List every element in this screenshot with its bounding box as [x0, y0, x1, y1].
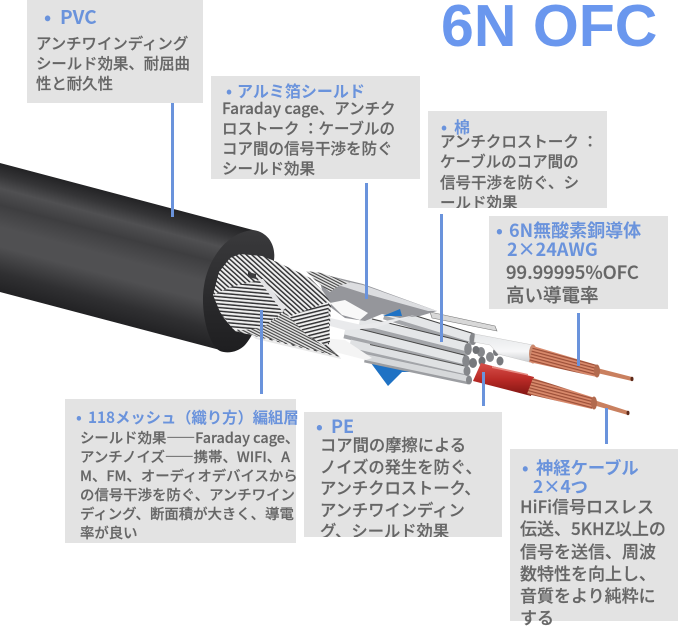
red insulated wire	[473, 363, 534, 396]
text: braid description: M、FM、オーディオデバイスから	[80, 465, 298, 486]
panel: 118 mesh braid: •	[76, 406, 82, 428]
text: braid description: ディング、断面積が大きく、導電	[80, 503, 294, 524]
text: PVC description	[36, 32, 190, 94]
text: PVC description: 性と耐久性	[36, 72, 113, 94]
back white wire sliver	[430, 312, 497, 331]
text: nerve cable description: HiFi信号ロスレス	[520, 493, 654, 518]
leader line: braid	[260, 310, 263, 394]
heading: braid: 118メッシュ（織り方）編組層	[88, 406, 299, 428]
text: nerve cable description: 伝送、5KHZ以上の	[520, 515, 666, 540]
copper conductor lower	[527, 378, 595, 409]
leader line: cotton	[440, 214, 443, 342]
text: cotton description: アンチクロストーク ：	[440, 130, 598, 152]
leader line: foil	[365, 183, 368, 299]
text: conductor description: 高い導電率	[506, 282, 599, 308]
text: conductor description: 99.99995%OFC	[506, 259, 639, 285]
text: foil description: Faraday cage、アンチク	[222, 97, 396, 119]
PE rods	[345, 307, 473, 380]
heading: conductor: 6N無酸素銅導体	[509, 217, 641, 243]
text: nerve cable description: 音質をより純粋に	[520, 582, 656, 607]
text: PE description: ノイズの発生を防ぐ、	[320, 454, 482, 478]
panel: 118 mesh braid	[65, 399, 296, 543]
text: PVC description: シールド効果、耐屈曲	[36, 52, 190, 74]
heading: nerve cable	[522, 454, 639, 498]
text: cotton description: ケーブルのコア間の	[440, 150, 579, 172]
aluminium foil shield	[318, 273, 437, 360]
heading: nerve cable: 2×4つ	[533, 473, 588, 498]
panel: nerve cable: •	[522, 454, 529, 479]
heading: cotton	[441, 114, 470, 138]
text: foil description: ロストーク ：ケーブルの	[222, 117, 395, 139]
white insulated wire	[474, 334, 533, 363]
text: conductor description	[506, 259, 639, 308]
text: PE description: コア間の摩擦による	[320, 432, 466, 456]
panel: aluminium foil shield: •	[226, 78, 232, 102]
heading: foil: アルミ箔シールド	[237, 78, 365, 102]
panel: nerve cable	[510, 449, 678, 621]
text: PE description: アンチクロストーク、	[320, 475, 481, 499]
heading: nerve cable: 神経ケーブル	[536, 454, 639, 479]
panel: aluminium foil shield	[211, 76, 420, 179]
panel: 6N conductor: •	[496, 217, 503, 243]
panel: cotton	[428, 111, 607, 208]
leader line: PE	[482, 372, 485, 406]
text: PVC description: アンチワインディング	[36, 32, 188, 54]
text: braid description: シールド効果——Faraday cage、	[80, 427, 299, 448]
text: foil description: コア間の信号干渉を防ぐ	[222, 137, 393, 159]
panel: PE	[304, 412, 502, 537]
text: cotton description: 信号干渉を防ぐ、シ	[440, 171, 579, 193]
text: braid description: アンチノイズ——携帯、WIFI、A	[80, 446, 290, 467]
heading: cotton: 棉	[454, 114, 470, 138]
text: cotton description	[440, 130, 598, 208]
text: nerve cable description: 信号を送信、周波	[520, 538, 656, 563]
woven braid shield	[213, 254, 350, 359]
black PVC jacket	[0, 163, 253, 350]
text: PE description	[320, 432, 482, 537]
heading: conductor: 2×24AWG	[507, 236, 598, 262]
panel: PVC	[27, 0, 203, 103]
heading: PE: PE	[331, 413, 354, 439]
jacket end cap	[203, 230, 274, 352]
heading: conductor	[496, 217, 641, 262]
leader line: PVC	[171, 103, 174, 217]
text: nerve cable description: 数特性を向上し、	[520, 560, 656, 585]
text: foil description	[222, 97, 396, 179]
heading: PVC: PVC	[60, 3, 97, 30]
text: foil description: シールド効果	[222, 157, 315, 179]
text: braid description: 率が良い	[80, 522, 138, 543]
text: braid description: の信号干渉を防ぐ、アンチワイン	[80, 484, 295, 505]
leader line: nerve cable	[605, 408, 608, 444]
heading: PVC	[44, 3, 97, 30]
text: PE description: アンチワインディン	[320, 496, 465, 520]
panel: PE: •	[316, 413, 323, 439]
rod ends	[462, 333, 504, 384]
panel: 6N conductor	[489, 216, 668, 309]
text: nerve cable description	[520, 493, 666, 626]
text: braid description	[80, 427, 299, 543]
panel: cotton: •	[441, 114, 447, 138]
copper conductor upper	[529, 346, 597, 377]
blue wrap lower triangle	[362, 351, 420, 386]
leader line: conductor	[577, 313, 580, 366]
heading: PE	[316, 413, 354, 439]
panel: PVC: •	[44, 3, 51, 30]
